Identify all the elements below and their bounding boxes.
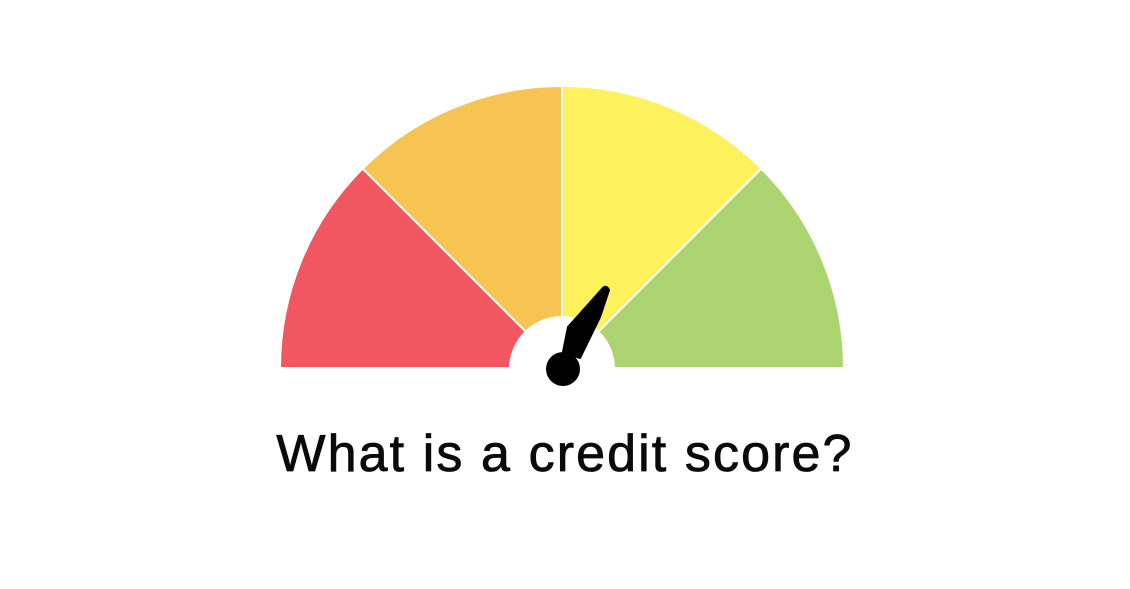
- center hub: [509, 316, 615, 369]
- needle: [546, 287, 609, 386]
- segment: yellow: [562, 86, 761, 368]
- segment: orange: [363, 86, 562, 368]
- title: What is a credit score?: [276, 425, 854, 483]
- segment: red: [280, 169, 562, 368]
- segment: green: [562, 169, 844, 368]
